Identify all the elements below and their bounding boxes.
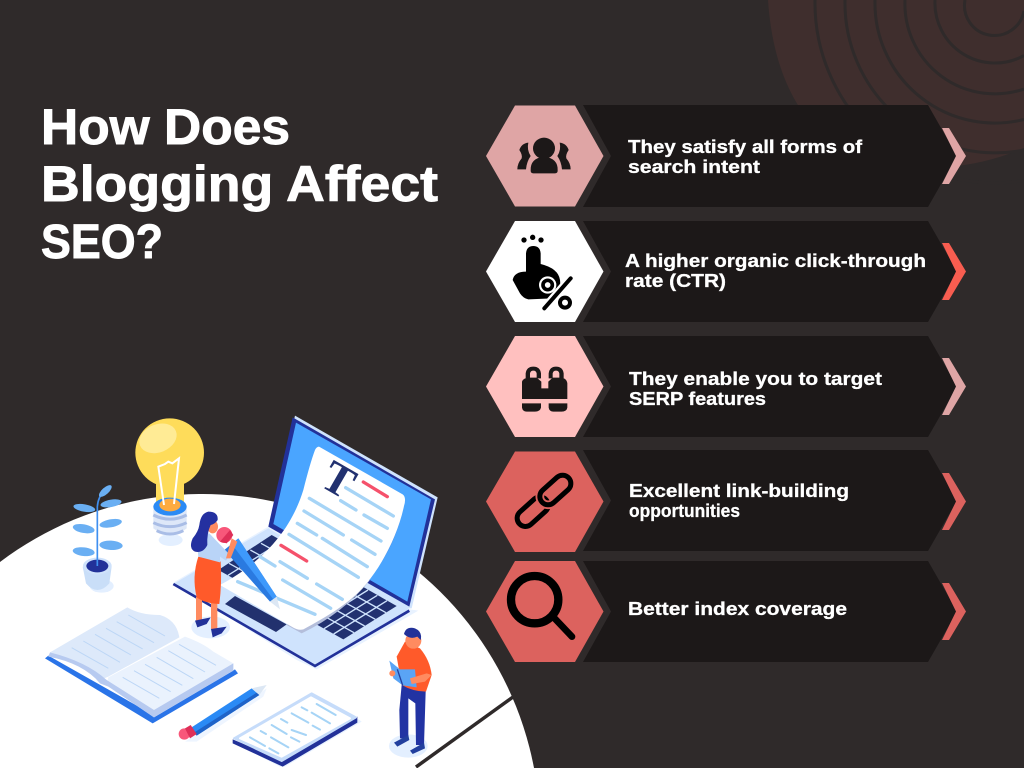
illustration: woman with giant pencil [191, 512, 280, 638]
row 5 text: Better index coverage [628, 599, 847, 619]
row 1 bar [583, 105, 957, 207]
row 3 bar [583, 336, 957, 437]
row 2 chevron [942, 243, 966, 300]
icon: binoculars [522, 367, 567, 412]
row 2 text: A higher organic click-through [625, 251, 926, 271]
illustration: man reading [389, 628, 432, 758]
title: SEO? [41, 216, 163, 269]
page text lines [238, 488, 393, 614]
shirt [198, 533, 230, 562]
row 2 text: rate (CTR) [625, 271, 726, 291]
row 2 text [625, 251, 926, 291]
illustration: light bulb [135, 418, 204, 546]
skirt [195, 557, 221, 604]
legs [196, 597, 202, 621]
row 5 bar [583, 561, 957, 662]
arm [226, 538, 237, 558]
book [389, 661, 417, 687]
icon: chain link [514, 472, 574, 530]
trousers [399, 685, 426, 745]
laptop screen [268, 416, 438, 608]
row 1 text: They satisfy all forms of [628, 137, 863, 157]
illustration: laptop [173, 416, 438, 669]
row 3 text: They enable you to target [629, 369, 882, 389]
eraser [216, 527, 232, 543]
illustration: potted plant [72, 483, 123, 593]
laptop trackpad [225, 596, 287, 632]
row 4 text: Excellent link-building [629, 481, 849, 501]
row 4 [486, 450, 966, 552]
row 2 bar [583, 221, 957, 322]
torso [397, 642, 432, 692]
row 2 hexagon [486, 221, 604, 322]
page T letter: T [313, 450, 364, 509]
head and hair [405, 633, 421, 649]
row 5 chevron [942, 583, 966, 640]
row 3 hexagon [486, 336, 604, 437]
illustration: desk pencil [179, 685, 267, 742]
row 4 hexagon [486, 452, 604, 552]
row 3 [486, 336, 966, 437]
title: Blogging Affect [41, 156, 438, 212]
desk edge line [416, 697, 513, 767]
paper shadow [287, 580, 370, 633]
row 2 [486, 221, 966, 322]
row 1 text [628, 137, 863, 177]
icon: magnifying glass [511, 576, 572, 637]
title [41, 99, 438, 269]
row 4 bar [583, 450, 957, 551]
arm [410, 673, 432, 684]
row 1 [486, 105, 966, 207]
row 1 chevron [942, 128, 966, 184]
white circular desk [0, 494, 534, 768]
row 4 chevron [942, 473, 966, 530]
row 1 text: search intent [628, 157, 760, 177]
row 5 hexagon [486, 561, 604, 662]
row 4 text: opportunities [629, 501, 740, 521]
row 4 text [629, 481, 849, 521]
decorative concentric circle blob [768, 0, 1024, 183]
document page [220, 447, 405, 630]
illustration: note pad [233, 693, 362, 767]
giant pencil [224, 538, 277, 602]
row 3 chevron [942, 358, 966, 415]
illustration: open book [45, 607, 238, 723]
row 3 text: SERP features [629, 389, 766, 409]
row 5 [486, 561, 966, 662]
icon: people group [517, 138, 571, 173]
laptop keyboard [218, 535, 397, 639]
row 3 text [629, 369, 882, 409]
title: How Does [41, 99, 290, 155]
row 1 hexagon [486, 106, 604, 206]
icon: tap finger with percent [513, 235, 571, 308]
head and hair [207, 520, 218, 533]
